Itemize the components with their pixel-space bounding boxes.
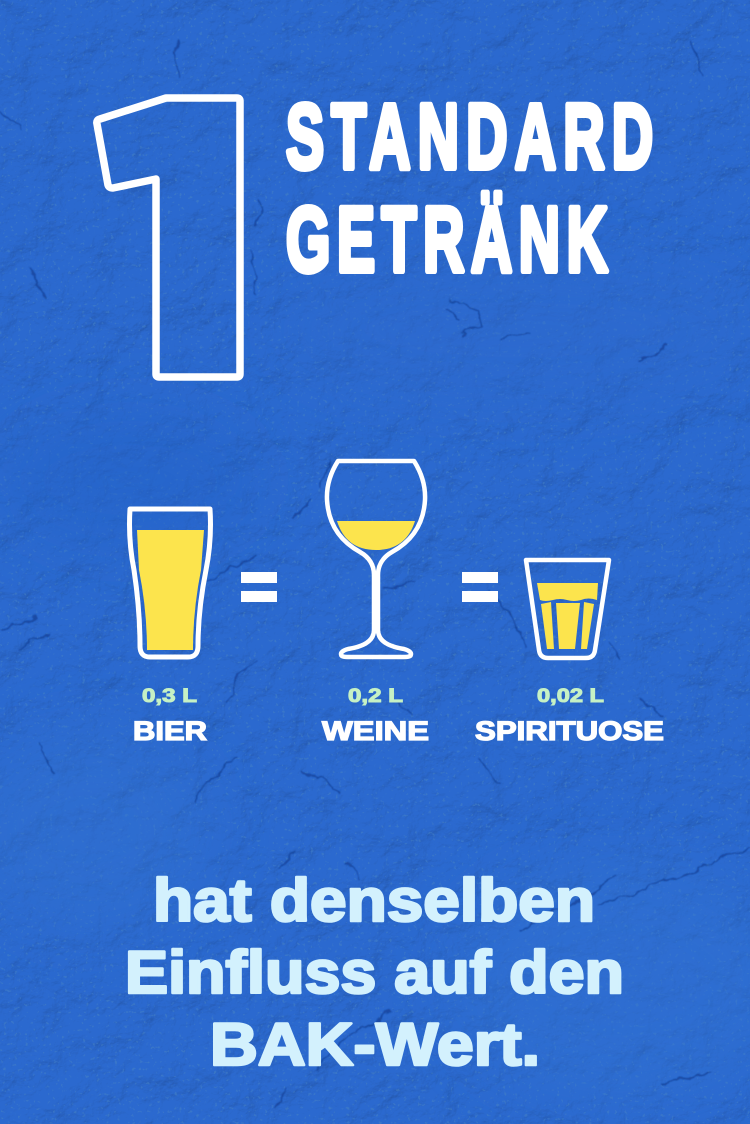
label: 0,3 L: 0,3 L bbox=[142, 686, 197, 707]
label: 0,2 L: 0,2 L bbox=[348, 686, 403, 707]
icon: spirit glass bbox=[526, 560, 609, 658]
statement line 2: Einfluss auf den bbox=[125, 939, 624, 1006]
spirit fill bbox=[537, 583, 598, 601]
icon: wine glass bbox=[327, 461, 425, 657]
wine glass outline bbox=[327, 461, 425, 657]
title line: STANDARD: STANDARD bbox=[286, 86, 653, 188]
wine fill bbox=[337, 521, 415, 550]
label: BIER: BIER bbox=[133, 716, 207, 746]
beer fill bbox=[137, 530, 204, 650]
statement line 1: hat denselben bbox=[153, 867, 595, 934]
drink labels bbox=[133, 716, 664, 746]
label: 0,02 L: 0,02 L bbox=[537, 686, 604, 707]
label: SPIRITUOSE: SPIRITUOSE bbox=[475, 716, 664, 746]
beer glass outline bbox=[130, 509, 210, 657]
title bbox=[286, 86, 653, 291]
spirit glass outline bbox=[526, 560, 609, 658]
closing statement bbox=[125, 867, 624, 1078]
icon: beer glass bbox=[130, 509, 210, 657]
label: WEINE: WEINE bbox=[322, 716, 429, 746]
volume labels bbox=[142, 686, 604, 707]
icon: outlined numeral 1 bbox=[97, 98, 240, 377]
title line: GETRÄNK: GETRÄNK bbox=[286, 189, 608, 291]
equals sign bbox=[241, 572, 277, 602]
statement line 3: BAK-Wert. bbox=[210, 1011, 540, 1078]
equals sign bbox=[462, 572, 498, 602]
